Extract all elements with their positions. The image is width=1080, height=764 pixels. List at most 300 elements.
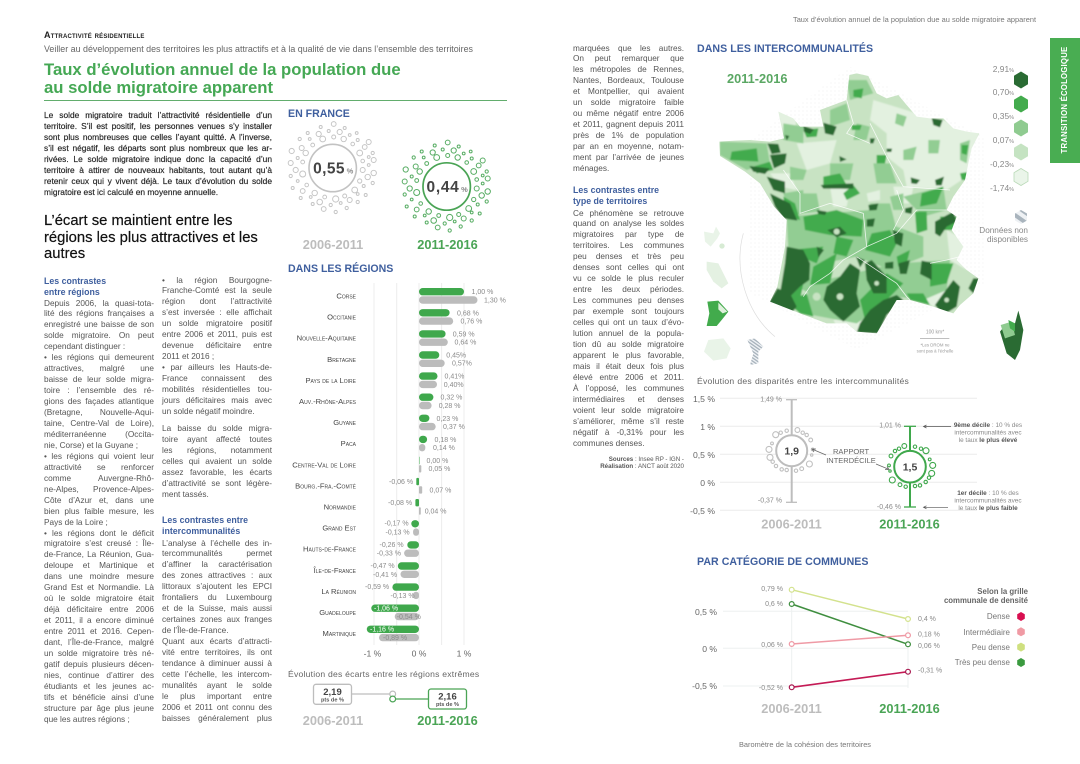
- text column 1: enregistré une baisse de son: [44, 320, 154, 329]
- text column 2 top: jours déficitaires mais avec: [162, 396, 272, 405]
- period labels: [761, 701, 940, 716]
- intro text: Le solde migratoire traduit l’attractivité résidentielle d’un: [44, 110, 272, 120]
- text column 1: nie, Corse) et la Guyane ;: [44, 441, 138, 450]
- text column 2 top: • la région Bourgogne-: [162, 276, 272, 284]
- subheading: contrasts between territory types: Les contrastes entre: [573, 184, 659, 194]
- regional bar chart: [292, 283, 506, 658]
- legend values: 0,70%: [993, 87, 1014, 97]
- text column 1: taine, Centre-Val de Loire),: [44, 419, 154, 428]
- value labels: -0,89 %: [383, 635, 407, 642]
- text column 1: de-France, La Réunion, Gua-: [44, 550, 154, 559]
- subheading: contrasts between regions: Les contrastes: [44, 276, 106, 286]
- value labels: 0,57%: [452, 361, 472, 368]
- axis labels: 1 %: [700, 422, 715, 432]
- line: peu dense: [761, 586, 936, 623]
- legend rows: Peu dense: [972, 643, 1011, 652]
- text column 3 top: [573, 44, 684, 173]
- no data label: [979, 226, 1028, 244]
- text column 2 top: celles qui avaient un solde: [162, 457, 272, 466]
- scale note: 100 km*: [926, 329, 944, 335]
- line: intermédiaire: [761, 632, 940, 649]
- scale note: sont pas à l’échelle: [917, 349, 954, 354]
- interdecile ratio label: [812, 447, 889, 470]
- box 2011-2016: pts de %: [436, 702, 459, 708]
- main heading: autres: [44, 246, 85, 262]
- circle 2006-2011: 0,55: [313, 160, 345, 178]
- bars 2006-2011: [379, 296, 478, 641]
- axis labels: 0 %: [700, 478, 715, 488]
- text column 1: solde migratoire. On peut: [44, 331, 154, 340]
- 9th decile note: [924, 422, 1022, 444]
- text column 3 top: les métropoles de Rennes,: [573, 65, 684, 74]
- text column 1: • les régions qui demeurent: [44, 353, 154, 362]
- value labels: -0,26 %: [380, 542, 404, 549]
- text column 2 bottom: cette l’échelle, les intercom-: [162, 670, 272, 679]
- circle 2011-2016: [402, 140, 490, 232]
- Guyane: [707, 301, 728, 326]
- text column 2 bottom: tercommunalités permet: [162, 549, 272, 558]
- legend values: 2,91%: [993, 64, 1014, 74]
- text column 2 top: région dont l’attractivité: [162, 297, 272, 306]
- value labels: -1,06 %: [374, 606, 398, 612]
- side tab: TRANSITION ÉCOLOGIQUE: [1060, 47, 1069, 153]
- text column 2 bottom: L’analyse à l’échelle des in-: [162, 538, 272, 548]
- region labels: Nouvelle-Aquitaine: [297, 334, 357, 343]
- value labels: 0,37 %: [443, 424, 465, 431]
- regional boundaries: [783, 100, 960, 300]
- extremes gap diagram: [303, 684, 478, 728]
- text column 1: (Bretagne, Nouvelle-Aqui-: [44, 408, 154, 417]
- region labels: La Réunion: [321, 587, 356, 596]
- text column 2 top: entre 2006 et 2011, puis est: [162, 330, 272, 339]
- no data label: disponibles: [987, 235, 1028, 244]
- period labels: 2006-2011: [761, 701, 822, 716]
- 1st decile note: 1er décile : 10 % des: [957, 490, 1019, 497]
- text column 1: attractives, malgré une: [44, 364, 154, 373]
- running header: Taux d’évolution annuel de la population due au solde migratoire apparent: [793, 15, 1036, 24]
- intro text: rivées. Le solde migratoire indique donc la capacité d’un: [44, 154, 272, 164]
- text column 3 top: et 2011, gagnent depuis 2011: [573, 120, 684, 129]
- box 2006-2011: 2,19: [323, 687, 342, 698]
- region labels: Pays de la Loire: [305, 376, 357, 385]
- value labels: -0,08 %: [388, 500, 412, 507]
- period labels: 2011-2016: [417, 713, 478, 728]
- legend title: [944, 587, 1029, 605]
- axis labels: -1 %: [364, 648, 382, 658]
- text column 3 bottom: vu ce solde le plus reculer: [573, 274, 684, 283]
- value labels: -0,17 %: [384, 521, 409, 528]
- text column 1: comme Auvergne-Rhô-: [44, 474, 154, 483]
- box 2006-2011: [314, 684, 352, 704]
- legend rows: [955, 612, 1025, 667]
- title: au solde migratoire apparent: [44, 78, 273, 97]
- text column 3 top: et Montpellier, qui avaient: [573, 87, 684, 96]
- circle 2006-2011: %: [347, 166, 354, 176]
- pale specks in the south: [813, 229, 949, 302]
- intro text: territoire. S’il est positif, les personnes venues s’y installer: [44, 120, 272, 130]
- text column 3 bottom: lution annuel de la popula-: [573, 329, 684, 338]
- circle 2011-2016: 0,44: [427, 179, 459, 196]
- region labels: Centre-Val de Loire: [292, 460, 357, 469]
- text column 3 bottom: apparent le plus favorable,: [573, 351, 684, 360]
- text column 2 top: Franche-Comté est la seule: [162, 286, 272, 295]
- text column 1: tifs et bénéficie ainsi d’une: [44, 693, 154, 702]
- value labels: -1,16 %: [370, 627, 394, 634]
- heading: dans les régions: DANS LES RÉGIONS: [288, 262, 393, 274]
- value labels: 0,14 %: [433, 445, 455, 452]
- line: dense: -0,52 %: [759, 685, 783, 692]
- value labels: 1,00 %: [472, 289, 493, 296]
- title: [44, 60, 401, 97]
- range 2011-2016: [877, 422, 936, 511]
- text column 2 top: La baisse du solde migra-: [162, 424, 272, 433]
- text column 2 bottom: Quant aux écarts d’attracti-: [162, 637, 272, 646]
- value labels: 0,04 %: [425, 508, 446, 516]
- value labels: 0,28 %: [439, 403, 460, 410]
- pale zones: [770, 100, 980, 333]
- subheading: contrasts between intercommunalities: intercommunalités: [162, 526, 240, 536]
- text column 2 top: ment tassés.: [162, 490, 209, 499]
- region labels: Île-de-France: [313, 566, 357, 575]
- period labels: 2006-2011: [303, 713, 363, 728]
- axis labels: [692, 607, 717, 691]
- axis labels: 0,5 %: [695, 607, 717, 617]
- line: intermédiaire: 0,06 %: [761, 642, 783, 649]
- text column 1: attractivité se renforcer: [44, 463, 154, 472]
- range 2006-2011: [758, 396, 814, 504]
- circle 2006-2011: [288, 122, 376, 214]
- value labels: 0,23 %: [436, 416, 458, 423]
- text column 1: Grand Est et Normandie. Là: [44, 583, 154, 592]
- axis labels: -0,5 %: [692, 681, 717, 691]
- heading: par catégorie de communes: PAR CATÉGORIE DE COMMUNES: [697, 556, 869, 568]
- extremes gap title: Évolution des écarts entre les régions extrêmes: [288, 669, 479, 679]
- text column 2 bottom: de l’Île-de-France.: [162, 626, 228, 635]
- text column 3 bottom: peu denses et très peu: [573, 252, 684, 261]
- legend values: 0,07%: [993, 135, 1014, 145]
- text column 1: • les régions qui voient leur: [44, 452, 154, 461]
- text column 3 top: ment par l’arrivée de jeunes: [573, 153, 684, 162]
- heading: en France: EN FRANCE: [288, 108, 350, 120]
- text column 2 bottom: munalités ayant le solde: [162, 681, 272, 690]
- text column 3 bottom: celles qui ont un taux d’évo-: [573, 318, 684, 327]
- text column 2 bottom: tendance à diminuer aussi à: [162, 659, 272, 668]
- text column 2 top: • par ailleurs les Hauts-de-: [162, 363, 272, 372]
- text column 1: entre 2011 et 2016. Cepen-: [44, 627, 154, 636]
- text column 1: Pays de la Loire ;: [44, 518, 108, 527]
- side tab: [1050, 38, 1080, 163]
- box 2011-2016: [428, 689, 466, 709]
- value labels: 0,45%: [446, 352, 466, 360]
- period labels: 2006-2011: [303, 237, 363, 252]
- metropolitan France: [720, 74, 980, 334]
- value labels: -0,13 %: [386, 530, 410, 536]
- text column 3 bottom: élevé entre 2006 et 2011.: [573, 373, 684, 382]
- axis labels: 1,5 %: [693, 394, 715, 404]
- legend values: [990, 64, 1014, 193]
- region labels: Paca: [341, 439, 357, 448]
- text column 3 top: près de 1% de population: [573, 131, 684, 140]
- text column 1: migratoire s’est creusé : Île-: [44, 539, 154, 548]
- main heading: régions les plus attractives et les: [44, 230, 258, 246]
- value labels: 0,41%: [444, 374, 464, 381]
- text column 3 top: ménages.: [573, 164, 609, 173]
- text column 1: où le solde migratoire était: [44, 594, 154, 603]
- value labels: -0,54 %: [397, 614, 421, 621]
- period labels: 2011-2016: [879, 701, 940, 716]
- text column 3 top: un solde migratoire faible: [573, 98, 684, 107]
- text column 1: que les autres régions ;: [44, 715, 130, 724]
- text column 1: déjà déficitaire entre 2006: [44, 605, 154, 614]
- text column 1: dans une moindre mesure: [44, 572, 154, 581]
- period labels: [303, 713, 478, 728]
- axis labels: 0,5 %: [693, 450, 715, 460]
- region labels: Corse: [336, 292, 357, 300]
- intro text: migratoire est ici calculé en moyenne annuelle.: [44, 186, 218, 196]
- region labels: Bretagne: [327, 355, 357, 364]
- text column 3 bottom: denses sont celles qui ont: [573, 263, 684, 272]
- Martinique: [707, 262, 728, 288]
- value labels: 0,59 %: [453, 331, 475, 338]
- disparities chart: [690, 394, 1022, 532]
- text column 3 bottom: [573, 208, 684, 448]
- text column 1: baisse de leur solde migra-: [44, 375, 154, 384]
- subheading: contrasts between territory types: [573, 184, 659, 206]
- main heading: L’écart se maintient entre les: [44, 213, 232, 229]
- text column 2 top: France connaissent des: [162, 374, 272, 383]
- text column 2 bottom: le plus important entre: [162, 692, 272, 701]
- text column 2 bottom: certaines zones aux franges: [162, 615, 272, 624]
- value labels: -0,13 %: [390, 593, 415, 600]
- value labels: 0,32 %: [440, 395, 462, 402]
- text column 3 bottom: négatif à -0,31% pour les: [573, 428, 684, 437]
- text column 2 top: toire ayant affecté toutes: [162, 435, 272, 444]
- text column 1: structure par âge plus jeune: [44, 704, 154, 713]
- text column 1: lité des régions françaises a: [44, 309, 154, 318]
- interdecile ratio label: RAPPORT: [833, 447, 869, 456]
- region labels: Normandie: [324, 502, 357, 512]
- line: très peu dense: 0,6 %: [765, 601, 783, 608]
- subheading: contrasts between intercommunalities: [162, 514, 248, 536]
- value labels: -0,33 %: [377, 551, 401, 558]
- text column 1: gions des façades atlantique: [44, 397, 154, 406]
- stippled backdrop: [750, 67, 983, 350]
- period labels: 2011-2016: [417, 237, 478, 252]
- region labels: [292, 292, 357, 638]
- text column 2 top: un solde migratoire positif: [162, 319, 272, 328]
- text column 2 bottom: [162, 538, 272, 723]
- line: dense: -0,31 %: [918, 668, 942, 674]
- text column 2 bottom: baisses généralement plus: [162, 714, 272, 723]
- legend values: -1,74%: [990, 183, 1014, 193]
- text column 3 bottom: voient leur solde migratoire: [573, 406, 684, 415]
- range 2011-2016: 1,01 %: [879, 422, 901, 430]
- no data label: Données non: [979, 226, 1028, 235]
- value labels: 0,07 %: [430, 487, 451, 494]
- text column 2 bottom: littoraux s’ajoutent les EPCI: [162, 582, 272, 591]
- text column 2 top: d’attractivité se sont légère-: [162, 479, 272, 488]
- text column 2 bottom: des zones attractives : aux: [162, 571, 272, 580]
- range 2011-2016: 1,5: [903, 462, 917, 474]
- subheading: contrasts between regions: [44, 276, 106, 297]
- main heading: [44, 213, 258, 262]
- text column 1: toire : l’ensemble des ré-: [44, 386, 154, 395]
- Mayotte: [747, 338, 763, 365]
- text column 2 bottom: 2006 et 2011 ont connu des: [162, 703, 272, 712]
- region labels: Hauts-de-France: [303, 545, 357, 554]
- text column 2 top: 2011 et 2016 ;: [162, 352, 214, 361]
- legend values: 0,35%: [993, 111, 1014, 121]
- title rule: [44, 100, 507, 101]
- value labels: 0,76 %: [460, 318, 482, 326]
- text column 2 bottom: vité entre territoires, ils ont: [162, 648, 272, 657]
- axis labels: -0,5 %: [690, 506, 715, 516]
- region labels: Guadeloupe: [319, 608, 357, 617]
- sources: [600, 456, 684, 470]
- text column 1: un solde migratoire très né-: [44, 649, 154, 658]
- period labels: 2011-2016: [879, 516, 940, 532]
- intro text: s’il est négatif, les départs sont plus nombreux que les ar-: [44, 142, 272, 152]
- period labels: 2006-2011: [761, 516, 822, 532]
- hexagon swatches: [1014, 72, 1028, 224]
- intro text: [44, 110, 272, 197]
- text column 3 top: marquées que les autres.: [573, 44, 684, 52]
- text column 3 bottom: par exemple sont toujours: [573, 307, 684, 316]
- text column 1: • les régions dont le déficit: [44, 529, 154, 538]
- region labels: Bourg.-Fra.-Comté: [295, 481, 357, 490]
- legend title: communale de densité: [944, 596, 1029, 605]
- text column 2 top: mobilités résidentielles tou-: [162, 385, 272, 394]
- 9th decile note: intercommunalités avec: [954, 430, 1022, 436]
- text column 1: nies, continue d’attirer des: [44, 671, 154, 680]
- region labels: Guyane: [333, 418, 357, 427]
- map legend: [979, 64, 1028, 244]
- text column 1: méditerranéenne (Occita-: [44, 430, 154, 439]
- text column 1: Depuis 2006, la quasi-tota-: [44, 298, 154, 308]
- choropleth map of France: [704, 67, 1024, 365]
- text column 3 bottom: quand on analyse les soldes: [573, 219, 684, 228]
- box 2011-2016: 2,16: [438, 692, 457, 702]
- text column 3 bottom: territoires. Les communes: [573, 241, 684, 250]
- range 2011-2016: -0,46 %: [877, 504, 901, 511]
- text column 3 bottom: À l’opposé, les communes: [573, 384, 684, 393]
- 1st decile note: le taux le plus faible: [958, 505, 1018, 512]
- text column 1: [44, 298, 154, 724]
- axis labels: 0 %: [702, 644, 717, 654]
- text column 2 top: s’est inversée : elle affichait: [162, 308, 272, 317]
- line: très peu dense: 0,06 %: [918, 643, 940, 650]
- text column 2 top: les régions, notamment: [162, 446, 272, 455]
- Corsica: [1000, 311, 1023, 360]
- value labels: 1,30 %: [484, 298, 506, 304]
- text column 2 top: [162, 276, 272, 499]
- text column 3 bottom: Les communes peu denses: [573, 296, 684, 305]
- bars 2011-2016: [367, 288, 464, 633]
- 1st decile note: [924, 490, 1022, 512]
- text column 3 bottom: Ce phénomène se retrouve: [573, 208, 684, 218]
- line: intermédiaire: 0,18 %: [918, 632, 940, 638]
- value labels: -0,41 %: [373, 572, 397, 579]
- legend rows: Intermédiaire: [963, 628, 1011, 637]
- 9th decile note: 9ème décile : 10 % des: [954, 422, 1022, 429]
- region labels: Occitanie: [327, 313, 357, 322]
- text column 2 bottom: et de la Suisse, mais aussi: [162, 604, 272, 613]
- value labels: 0,05 %: [428, 466, 450, 473]
- text column 2 top: devenue déficitaire entre: [162, 341, 272, 350]
- text column 1: Côte d’Azur et, dans une: [44, 496, 154, 505]
- intro text: sont plus nombreuses que celles l’ayant quitté. A l’inverse,: [44, 132, 272, 142]
- section kicker: Attractivité résidentielle: [44, 30, 145, 40]
- text column 3 top: ou même négatif entre 2006: [573, 109, 684, 118]
- period labels: [303, 237, 478, 252]
- text column 1: gatif depuis plusieurs décen-: [44, 660, 154, 669]
- axis labels: 0 %: [412, 648, 427, 658]
- text column 1: dant, l’Île-de-France, malgré: [44, 638, 154, 647]
- dark-green zones: [749, 118, 980, 333]
- text column 3 bottom: entre les deux périodes.: [573, 285, 684, 294]
- region labels: Auv.-Rhône-Alpes: [299, 397, 357, 406]
- text column 2 bottom: d’affiner la caractérisation: [162, 560, 272, 569]
- text column 1: bien plus faible mesure, les: [44, 507, 154, 516]
- subheading: contrasts between regions: entre régions: [44, 286, 100, 296]
- value labels: 0,00 %: [426, 458, 448, 465]
- intro text: territoire à attirer de nouveaux habitants, tout autant qu’à: [44, 164, 272, 174]
- La Réunion: [704, 338, 731, 361]
- footer: Baromètre de la cohésion des territoires: [739, 740, 871, 749]
- map period label: 2011-2016: [727, 71, 788, 86]
- range 2006-2011: 1,49 %: [760, 396, 782, 404]
- national rate circles: [288, 121, 491, 252]
- range 2006-2011: -0,37 %: [758, 498, 782, 504]
- Guadeloupe: [704, 227, 725, 249]
- text column 3 top: On peut remarquer que: [573, 54, 684, 63]
- legend rows: Dense: [987, 612, 1011, 621]
- title: Taux d’évolution annuel de la population due: [44, 60, 401, 79]
- intro text: retenir ceux qui y vivent déjà. Le taux d’évolution du solde: [44, 176, 272, 186]
- text column 1: ne-Alpes, Provence-Alpes-: [44, 485, 154, 494]
- value labels: 0,40%: [444, 382, 464, 389]
- text column 2 top: assez favorable, les écarts: [162, 468, 272, 477]
- value labels: [365, 289, 506, 642]
- text column 3 bottom: communes denses.: [573, 439, 645, 448]
- text column 1: étudiants et les jeunes ac-: [44, 682, 154, 691]
- text column 3 top: Nantes, Bordeaux, Toulouse: [573, 76, 684, 85]
- axis labels: 1 %: [457, 648, 472, 658]
- text column 3 bottom: tion dû au solde migratoire: [573, 340, 684, 349]
- line: très peu dense: [765, 601, 940, 650]
- text column 1: cependant distinguer :: [44, 342, 125, 351]
- mid-green zones: [720, 80, 970, 323]
- value labels: 0,64 %: [454, 340, 476, 347]
- range 2006-2011: 1,9: [784, 446, 799, 458]
- region labels: Grand Est: [322, 524, 356, 533]
- text column 2 top: un solde négatif moindre.: [162, 407, 255, 416]
- heading: dans les intercommunalités: DANS LES INTERCOMMUNALITÉS: [697, 42, 873, 54]
- text column 3 bottom: s’améliorer, même s’il reste: [573, 417, 684, 426]
- text column 1: et 2011, il a encore diminué: [44, 616, 154, 625]
- text column 3 top: par an en moyenne, notam-: [573, 142, 684, 151]
- value labels: 0,18 %: [434, 437, 456, 444]
- period labels: [761, 516, 940, 532]
- disparities chart title: Évolution des disparités entre les intercommunalités: [697, 376, 909, 386]
- bright-green zones: [730, 88, 970, 320]
- legend values: -0,23%: [990, 159, 1014, 169]
- line: peu dense: 0,79 %: [761, 586, 783, 593]
- line: peu dense: 0,4 %: [918, 616, 936, 623]
- value labels: -0,59 %: [365, 584, 389, 591]
- commune category slope chart: [692, 586, 1029, 716]
- text column 1: deloupe et Martinique et: [44, 561, 154, 570]
